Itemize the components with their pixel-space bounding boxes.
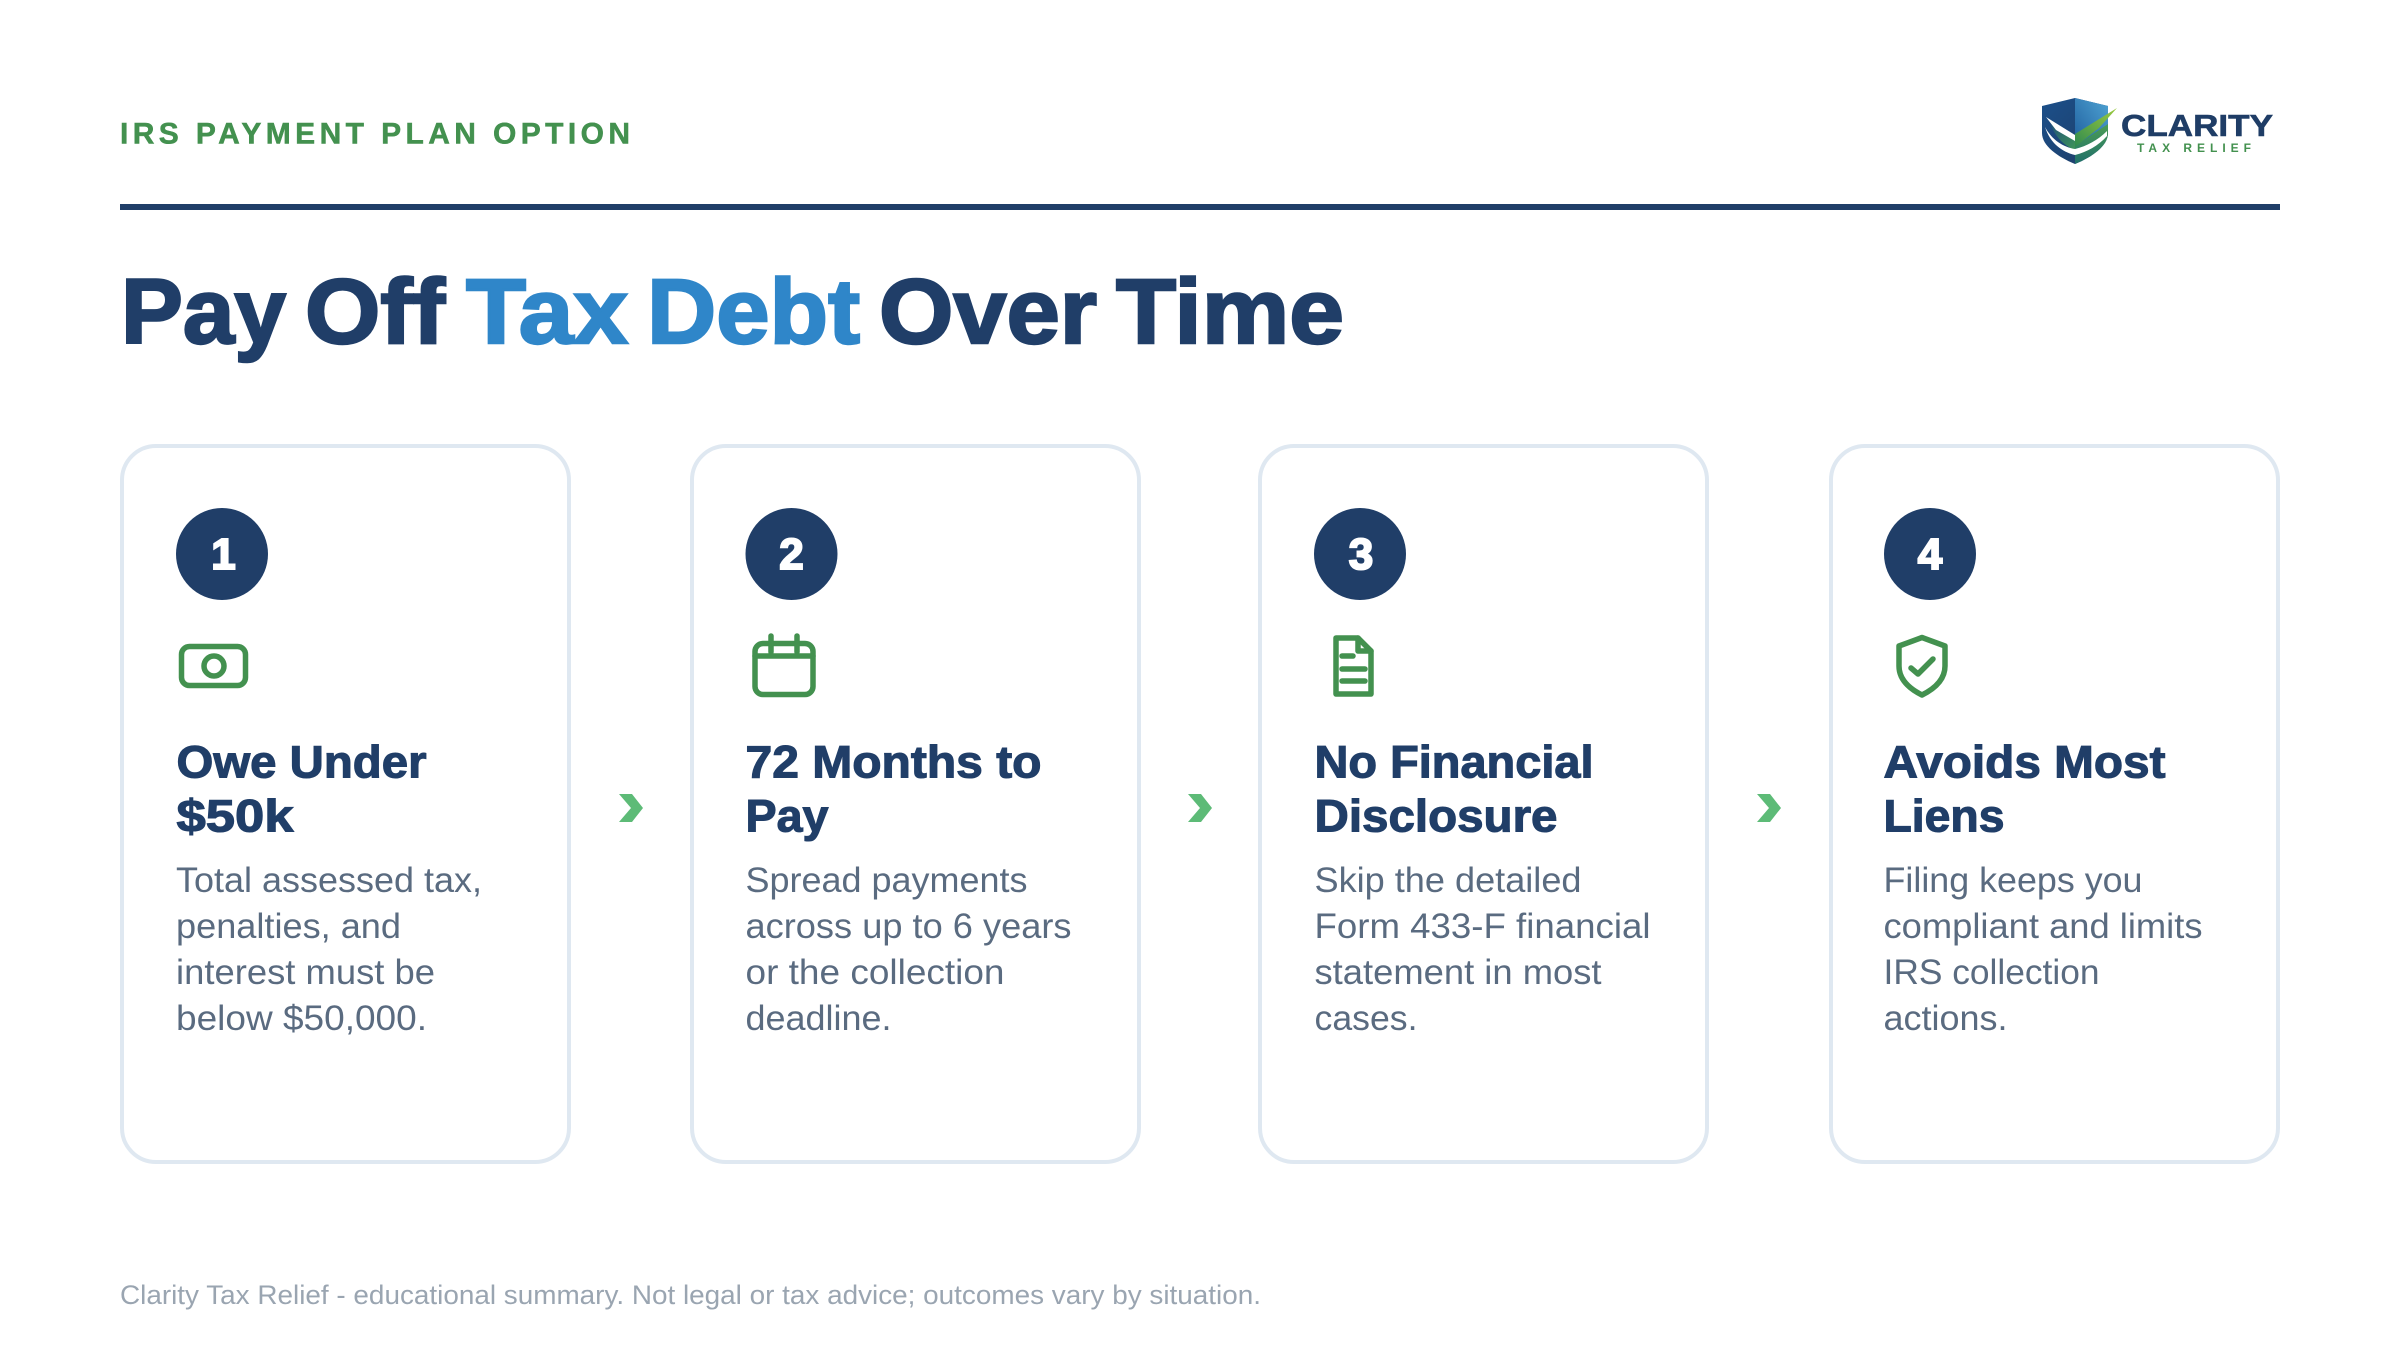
step 3 description: statement in most	[1314, 953, 1602, 992]
step 2 description: across up to 6 years	[746, 907, 1072, 946]
panel: step 2	[692, 446, 1139, 1162]
step 1 description: penalties, and	[176, 907, 401, 946]
panel: step 1	[122, 446, 569, 1162]
title: Pay	[121, 261, 286, 363]
header rule	[120, 204, 2280, 210]
icon: calendar	[755, 636, 813, 694]
footer disclaimer: Clarity Tax Relief - educational summary. Not legal or tax advice; outcomes vary by situation.	[120, 1280, 1261, 1310]
step number 4	[1884, 508, 1976, 600]
logo wordmark: CLARITY	[2121, 108, 2273, 143]
step 4 description: IRS collection	[1884, 953, 2100, 992]
step 4 description: Filing keeps you	[1884, 861, 2142, 900]
step 1 description: interest must be	[176, 953, 435, 992]
step number 3	[1314, 508, 1406, 600]
step number 2: 2	[779, 530, 804, 579]
step 4 description: compliant and limits	[1884, 907, 2202, 946]
step 2 description: or the collection	[746, 953, 1004, 992]
panel: step 3	[1260, 446, 1707, 1162]
step 1 heading: Owe Under	[176, 736, 426, 788]
step number 3: 3	[1349, 530, 1373, 579]
icon: document	[1336, 638, 1371, 694]
title: Tax	[466, 261, 628, 363]
step 4 heading: Avoids Most	[1884, 736, 2166, 788]
step 2 description: deadline.	[746, 999, 892, 1038]
step number 2	[746, 508, 838, 600]
step number 1	[176, 508, 268, 600]
step 3 description: Form 433-F financial	[1314, 907, 1650, 946]
step 4 heading: Liens	[1884, 790, 2004, 842]
step 2 heading	[746, 736, 1042, 842]
title: Off	[305, 261, 445, 363]
panel: step 4	[1831, 446, 2278, 1162]
step 3 description: Skip the detailed	[1314, 861, 1582, 900]
step 3 description: cases.	[1314, 999, 1418, 1038]
step number 4: 4	[1918, 530, 1943, 579]
step 4 description: actions.	[1884, 999, 2008, 1038]
title: Time	[1116, 261, 1344, 363]
step 1 description: below $50,000.	[176, 999, 427, 1038]
step 1 heading	[176, 736, 426, 842]
title	[121, 261, 1344, 363]
step 1 description: Total assessed tax,	[176, 861, 482, 900]
logo tagline: TAX RELIEF	[2137, 141, 2251, 155]
step 1 heading: $50k	[176, 790, 295, 842]
step number 1: 1	[211, 530, 236, 579]
arrow 3 to 4	[1757, 794, 1781, 822]
eyebrow label: IRS PAYMENT PLAN OPTION	[120, 118, 630, 150]
icon: shield check	[1899, 638, 1945, 695]
arrow 2 to 3	[1188, 794, 1212, 822]
title: Debt	[647, 261, 860, 363]
step 3 heading: Disclosure	[1314, 790, 1558, 842]
step 2 description: Spread payments	[746, 861, 1028, 900]
title: Over	[879, 261, 1097, 363]
step 1 description	[176, 861, 482, 1038]
step 3 description	[1314, 861, 1650, 1038]
logo shield	[2042, 98, 2117, 164]
step 2 description	[746, 861, 1072, 1038]
step 4 heading	[1884, 736, 2166, 842]
step 2 heading: 72 Months to	[746, 736, 1042, 788]
logo: Clarity Tax Relief	[2042, 98, 2273, 164]
step 3 heading: No Financial	[1314, 736, 1594, 788]
icon: banknote	[182, 646, 246, 686]
step 4 description	[1884, 861, 2202, 1038]
step 2 heading: Pay	[746, 790, 828, 842]
step 3 heading	[1314, 736, 1594, 842]
arrow 1 to 2	[619, 794, 643, 822]
